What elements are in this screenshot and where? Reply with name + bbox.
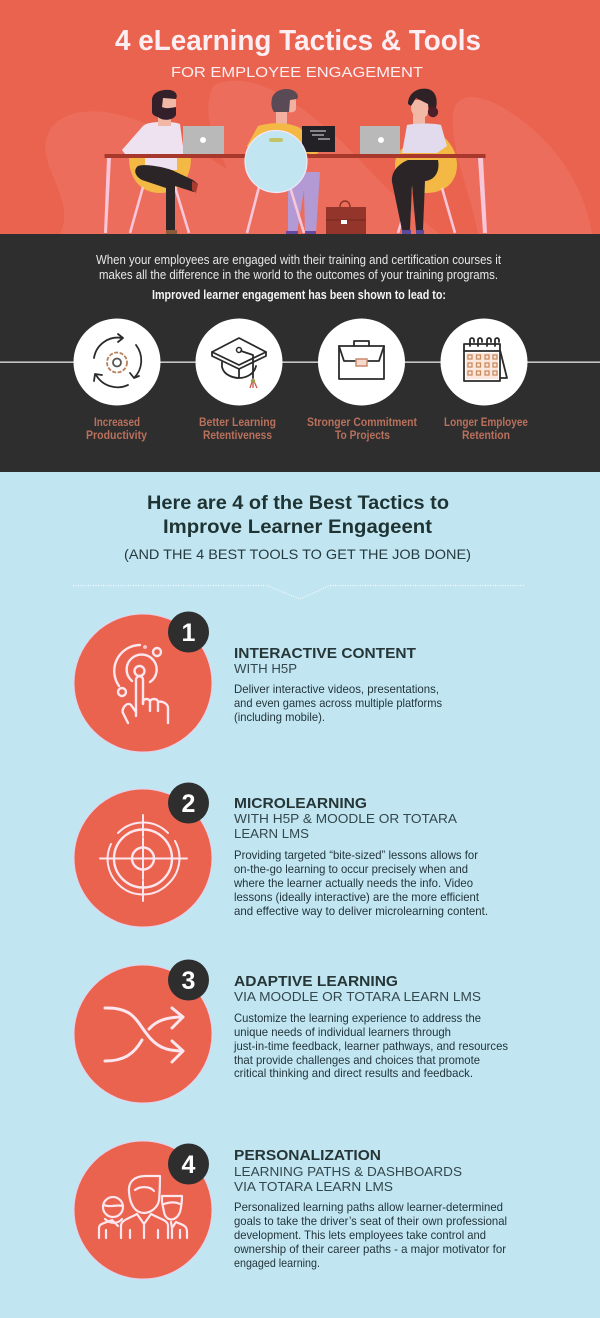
briefcase: [326, 201, 366, 234]
illustration: three people at a desk: [104, 89, 487, 234]
label: [307, 417, 417, 442]
benefit: longer retention: [440, 318, 528, 442]
benefit: increased productivity: [74, 318, 160, 442]
number badge 1: [168, 612, 209, 652]
text 4: LEARNING PATHS & DASHBOARDS: [234, 1164, 462, 1179]
icon circle 4: [74, 1141, 212, 1279]
label: Increased: [94, 417, 140, 429]
text 3: that provide challenges and choices that promote: [234, 1053, 480, 1067]
label: Retentiveness: [203, 430, 272, 442]
subtitle: FOR EMPLOYEE ENGAGEMENT: [171, 64, 423, 81]
text 1: (including mobile).: [234, 710, 325, 724]
text 2: [233, 795, 488, 918]
left person: [122, 90, 198, 234]
benefit: better learning: [196, 318, 282, 442]
number badge 3: [168, 960, 209, 1000]
text 2: Providing targeted “bite-sized” lessons allows for: [234, 848, 478, 862]
icon: graduation cap: [212, 338, 266, 388]
text 3: just-in-time feedback, learner pathways, and resources: [233, 1039, 508, 1053]
text 2: where the learner actually needs the info. Video: [233, 876, 473, 890]
icon: briefcase: [339, 341, 384, 379]
label: Stronger Commitment: [307, 417, 417, 429]
tactic 4: [74, 1141, 507, 1279]
text 4: VIA TOTARA LEARN LMS: [234, 1179, 393, 1194]
text 4: PERSONALIZATION: [234, 1147, 381, 1164]
label: [86, 417, 148, 442]
label: [199, 417, 276, 442]
text 3: VIA MOODLE OR TOTARA LEARN LMS: [234, 989, 481, 1004]
number badge 4: [168, 1144, 209, 1184]
number badge 3: 3: [182, 967, 195, 995]
text 1: and even games across multiple platforms: [234, 696, 442, 710]
right chair: [395, 138, 457, 233]
left laptop: [183, 126, 224, 154]
icon circle 2: [74, 789, 212, 927]
text 4: engaged learning.: [234, 1256, 320, 1270]
right person: [392, 89, 447, 234]
heading: [147, 493, 449, 538]
heading: Improve Learner Engageent: [163, 517, 433, 538]
label: Retention: [462, 430, 510, 442]
benefit: stronger commitment: [307, 318, 417, 442]
subheading: (AND THE 4 BEST TOOLS TO GET THE JOB DONE): [124, 546, 471, 562]
text 2: on-the-go learning to occur precisely when and: [234, 862, 468, 876]
icon: group of people: [99, 1176, 187, 1238]
icon: shuffle arrows: [105, 1008, 183, 1062]
icon circle 1: [74, 614, 212, 752]
label: Longer Employee: [444, 417, 528, 429]
intro text: [96, 253, 501, 302]
text 3: unique needs of individual learners through: [234, 1025, 451, 1039]
label: [444, 417, 528, 442]
middle laptop: [302, 126, 335, 152]
text 3: critical thinking and direct results and feedback.: [234, 1066, 473, 1080]
number badge 2: [168, 782, 209, 824]
number badge 1: 1: [182, 619, 196, 647]
text 2: MICROLEARNING: [234, 795, 367, 812]
right laptop: [360, 126, 400, 154]
text 2: and effective way to deliver microlearning content.: [234, 904, 488, 918]
middle person: [247, 89, 320, 234]
tactic 1: [74, 612, 442, 752]
text 1: [234, 645, 442, 724]
tactic 3: [74, 960, 508, 1103]
text 1: WITH H5P: [234, 661, 297, 676]
icon: target crosshair: [100, 815, 187, 901]
text 1: INTERACTIVE CONTENT: [234, 645, 416, 662]
label: Better Learning: [199, 417, 276, 429]
panel: header: [0, 0, 600, 234]
text 2: LEARN LMS: [234, 826, 309, 841]
icon: touch target: [114, 645, 168, 723]
heading: Here are 4 of the Best Tactics to: [147, 493, 449, 514]
number badge 2: 2: [182, 790, 195, 818]
intro text: makes all the difference in the world to the outcomes of your training programs.: [99, 268, 498, 282]
intro text: When your employees are engaged with their training and certification courses it: [96, 253, 501, 267]
number badge 4: 4: [182, 1151, 196, 1179]
title: 4 eLearning Tactics & Tools: [115, 25, 481, 57]
text 3: Customize the learning experience to address the: [234, 1011, 481, 1025]
text 3: [233, 973, 508, 1080]
text 4: ownership of their career paths - a major motivator for: [234, 1242, 506, 1256]
icon circle 3: [74, 965, 212, 1103]
intro text: Improved learner engagement has been shown to lead to:: [152, 288, 446, 302]
chair with back facing viewer: [245, 130, 307, 233]
text 4: development. This lets employees take control and: [234, 1228, 486, 1242]
text 4: Personalized learning paths allow learner-determined: [234, 1200, 503, 1214]
text 1: Deliver interactive videos, presentations,: [234, 682, 439, 696]
label: Productivity: [86, 430, 148, 442]
left chair: [129, 158, 191, 233]
text 2: WITH H5P & MOODLE OR TOTARA: [234, 811, 457, 826]
label: To Projects: [335, 430, 390, 442]
icon: calendar: [464, 338, 507, 381]
desk: [104, 154, 487, 233]
text 3: ADAPTIVE LEARNING: [234, 973, 398, 990]
panel: dark intro: [0, 234, 600, 472]
text 2: lessons (ideally interactive) are the more efficient: [234, 890, 480, 904]
text 4: [234, 1147, 507, 1270]
text 4: goals to take the driver’s seat of their own professional: [234, 1214, 507, 1228]
tactic 2: [74, 782, 488, 927]
icon: cycle with gear: [94, 334, 141, 387]
panel: tactics section: [0, 472, 600, 1318]
